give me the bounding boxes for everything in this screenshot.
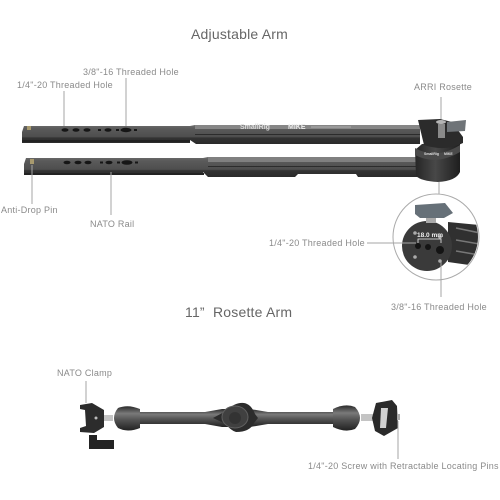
lens: knob: [415, 203, 453, 218]
upper arm holes: [62, 128, 137, 132]
upper arm: [22, 124, 420, 144]
lens: joint body: [402, 221, 452, 271]
arm tube: [138, 409, 335, 427]
lower arm: [24, 157, 420, 177]
lens: threaded holes: [415, 243, 444, 254]
upper arm branding: SmallRig: [240, 124, 270, 131]
label: Anti-Drop Pin: Anti-Drop Pin: [1, 205, 58, 215]
label: 3/8"-16 Threaded Hole detail: 3/8"-16 Threaded Hole: [391, 302, 487, 312]
label: 3/8"-16 Threaded Hole: [83, 67, 179, 126]
ARRI rosette joint: [415, 119, 466, 182]
label: NATO Clamp: NATO Clamp: [57, 368, 112, 378]
icon: rosette knob: [447, 120, 466, 132]
rosette head: [372, 400, 398, 436]
label: ARRI Rosette: [414, 82, 472, 122]
centre hub: [213, 403, 258, 432]
ARRI rosette joint: MIKE: [444, 152, 453, 156]
upper arm: MIKE: [288, 124, 306, 131]
detail circle: [393, 194, 490, 280]
label: lower 1/4"-20 Threaded Hole: 1/4"-20 Threaded Hole: [269, 238, 365, 248]
label: NATO Rail: NATO Rail: [90, 219, 134, 229]
detail circle: 18.0 mm: [417, 232, 443, 239]
lens: dimension bracket: [418, 239, 441, 243]
NATO clamp: [80, 403, 114, 449]
label: NATO Rail: [90, 172, 134, 229]
label: top 1/4"-20 Threaded Hole: [17, 80, 113, 127]
label: NATO Clamp: [57, 368, 112, 403]
connector line from rosette to detail circle: [438, 182, 440, 194]
title: 11" Rosette Arm: 11” Rosette Arm: [185, 304, 292, 320]
label: 3/8"-16 Threaded Hole detail: [391, 262, 487, 312]
lower arm holes: [64, 160, 138, 165]
icon: upper arm pin: [27, 126, 31, 130]
icon: lower arm pin: [30, 159, 34, 164]
rosette arm: [80, 400, 400, 449]
label: 1/4"-20 Screw with Retractable Locating Pins: 1/4"-20 Screw with Retractable Locating Pins: [308, 461, 499, 471]
ARRI rosette joint: SmallRig: [424, 152, 439, 156]
title: Adjustable Arm: Adjustable Arm: [191, 26, 288, 42]
label: 3/8"-16 Threaded Hole: 3/8"-16 Threaded Hole: [83, 67, 179, 77]
right ball: [333, 405, 360, 431]
lens: screws: [413, 231, 442, 263]
label: top 1/4"-20 Threaded Hole: 1/4"-20 Threaded Hole: [17, 80, 113, 90]
label: Anti-Drop Pin: [1, 165, 58, 215]
left ball: [114, 406, 140, 430]
label: ARRI Rosette: ARRI Rosette: [414, 82, 472, 92]
